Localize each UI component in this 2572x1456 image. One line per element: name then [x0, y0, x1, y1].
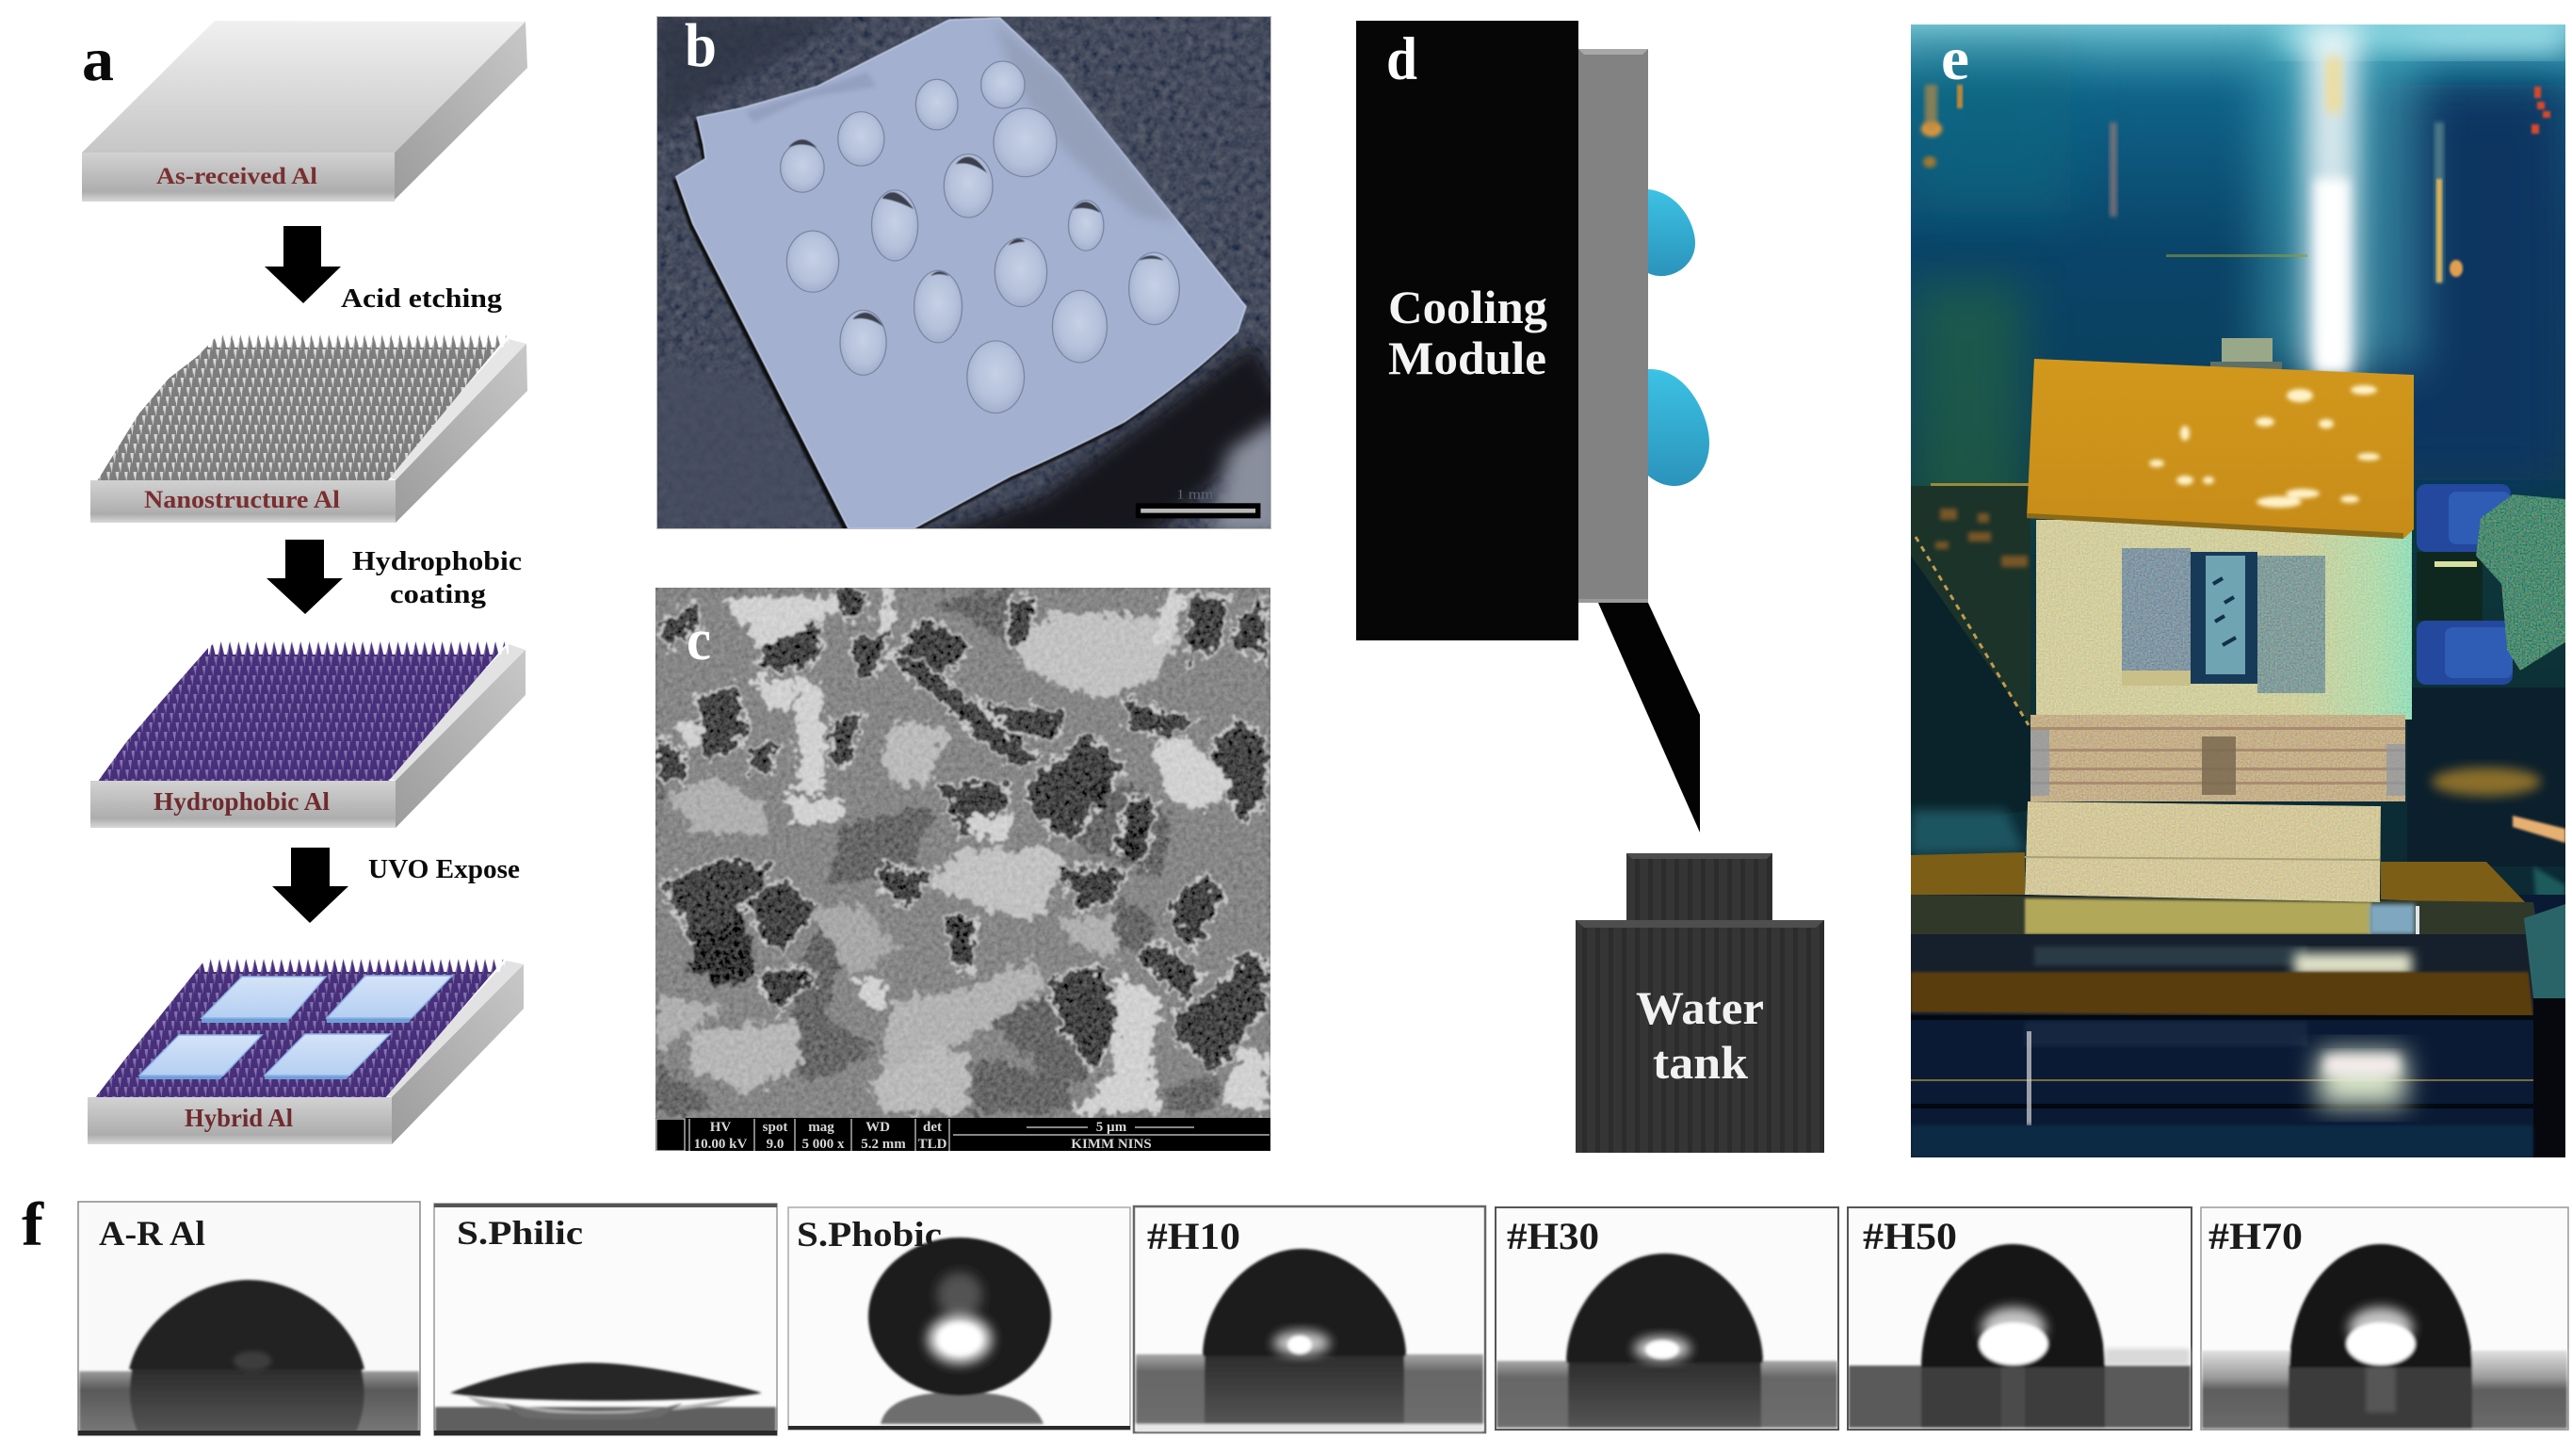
- SEM info bar: TLD: [918, 1137, 947, 1152]
- slab: as-received Al: [82, 21, 527, 202]
- wall: [2036, 520, 2412, 720]
- droplet reflections: [788, 139, 1164, 327]
- step label: hydrophobic coating: [352, 546, 522, 609]
- contact angle: #H30: #H30: [1507, 1215, 1599, 1257]
- slab: hydrophobic Al: Hydrophobic Al: [154, 787, 330, 816]
- mid-tone facets: [657, 589, 1221, 1112]
- SEM info bar: 9.0: [767, 1137, 784, 1152]
- contact angle: S.Phobic: S.Phobic: [797, 1216, 942, 1254]
- arrow: acid etching: [265, 226, 341, 303]
- slab: as-received Al: As-received Al: [156, 164, 317, 189]
- SEM info bar: HV: [710, 1120, 731, 1135]
- arrow: UVO expose: [272, 848, 348, 923]
- panel a: fabrication schematic: [82, 21, 527, 1144]
- panel d: water collection schematic: [1356, 21, 1824, 1153]
- clear acrylic band: [2030, 715, 2405, 801]
- contact angle: A-R Al: [78, 1202, 420, 1435]
- SEM info bar: spot: [763, 1120, 787, 1135]
- darkest cavity: [691, 913, 758, 989]
- panel c: SEM micrograph: [655, 588, 1270, 1152]
- step label: hydrophobic coating: coating: [390, 579, 487, 609]
- droplets: [781, 61, 1179, 413]
- slab: nanostructure Al: [90, 334, 527, 523]
- water tank: tank: [1653, 1036, 1748, 1089]
- cooling module: [1356, 21, 1578, 640]
- roof: [2027, 359, 2414, 539]
- funnel: [1598, 603, 1700, 833]
- SEM info bar: det: [923, 1120, 942, 1135]
- bolt: [2222, 338, 2273, 363]
- SEM info bar: 5.2 mm: [861, 1137, 906, 1152]
- house model: [2025, 338, 2414, 902]
- panel f: contact angle images: [22, 1190, 2568, 1435]
- step label: UVO expose: UVO Expose: [368, 854, 520, 884]
- label b: b: [685, 11, 717, 80]
- label f: f: [22, 1190, 44, 1259]
- SEM info bar: WD: [865, 1120, 890, 1135]
- scale bar: [1136, 487, 1260, 518]
- cooling module: Module: [1388, 332, 1546, 384]
- bright flakes: [657, 589, 1267, 1112]
- panel e: photo of house model: [1911, 24, 2565, 1157]
- lower-left shelf: [1911, 486, 2030, 855]
- slab: hybrid Al: [88, 959, 524, 1144]
- SEM info bar: [655, 1118, 1270, 1152]
- condensing plate: [1578, 49, 1648, 603]
- step label: acid etching: Acid etching: [341, 283, 503, 314]
- contact angle: #H50: #H50: [1863, 1215, 1957, 1257]
- chamber reflections: [1911, 24, 2565, 527]
- lower tray and reflective base: [1911, 852, 2565, 1157]
- right side dark region: [2407, 688, 2565, 895]
- water droplets: [1648, 189, 1709, 486]
- label e: e: [1941, 24, 1969, 93]
- contact angle: S.Philic: S.Philic: [457, 1214, 583, 1252]
- contact angle: S.Phobic: [788, 1207, 1130, 1430]
- hydrophilic patches: [139, 976, 452, 1079]
- dark pits: [657, 589, 1267, 1074]
- contact angle: #H10: #H10: [1147, 1215, 1240, 1257]
- SEM info bar: KIMM NINS: [1071, 1137, 1152, 1152]
- window shutters: [2122, 548, 2191, 685]
- label c: c: [687, 608, 711, 672]
- water tank: Water: [1636, 981, 1764, 1034]
- shadow patches around the plate: [925, 337, 1270, 528]
- contact angle: #H70: [2201, 1207, 2568, 1430]
- slab: nanostructure Al: Nanostructure Al: [144, 486, 340, 513]
- SEM info bar: mag: [808, 1120, 834, 1135]
- contact angle: #H50: [1848, 1207, 2192, 1430]
- water tank: [1576, 853, 1824, 1153]
- base block: [2025, 801, 2381, 902]
- plate: [672, 119, 1236, 528]
- panel b: photo of droplets on hybrid plate: [653, 11, 1296, 541]
- label d: d: [1386, 25, 1417, 93]
- SEM info bar: 5 µm: [1096, 1120, 1127, 1135]
- contact angle: #H30: [1496, 1207, 1838, 1430]
- scale bar: 1 mm: [1176, 487, 1214, 502]
- step label: hydrophobic coating: Hydrophobic: [352, 546, 522, 576]
- contact angle: A-R Al: A-R Al: [99, 1215, 205, 1254]
- arrow: hydrophobic coating: [267, 540, 343, 614]
- label a: a: [82, 25, 114, 94]
- glove: [2476, 494, 2565, 671]
- SEM info bar: 5 000 x: [802, 1137, 845, 1152]
- slab: hydrophobic Al: [90, 641, 526, 828]
- contact angle: S.Philic: [434, 1204, 777, 1435]
- contact angle: #H70: #H70: [2208, 1215, 2303, 1257]
- contact angle: #H10: [1134, 1206, 1485, 1432]
- slab: hybrid Al: Hybrid Al: [185, 1104, 293, 1132]
- cooling module: Cooling: [1388, 281, 1547, 333]
- SEM info bar: 10.00 kV: [694, 1137, 747, 1152]
- blue tube fittings: [2417, 484, 2513, 685]
